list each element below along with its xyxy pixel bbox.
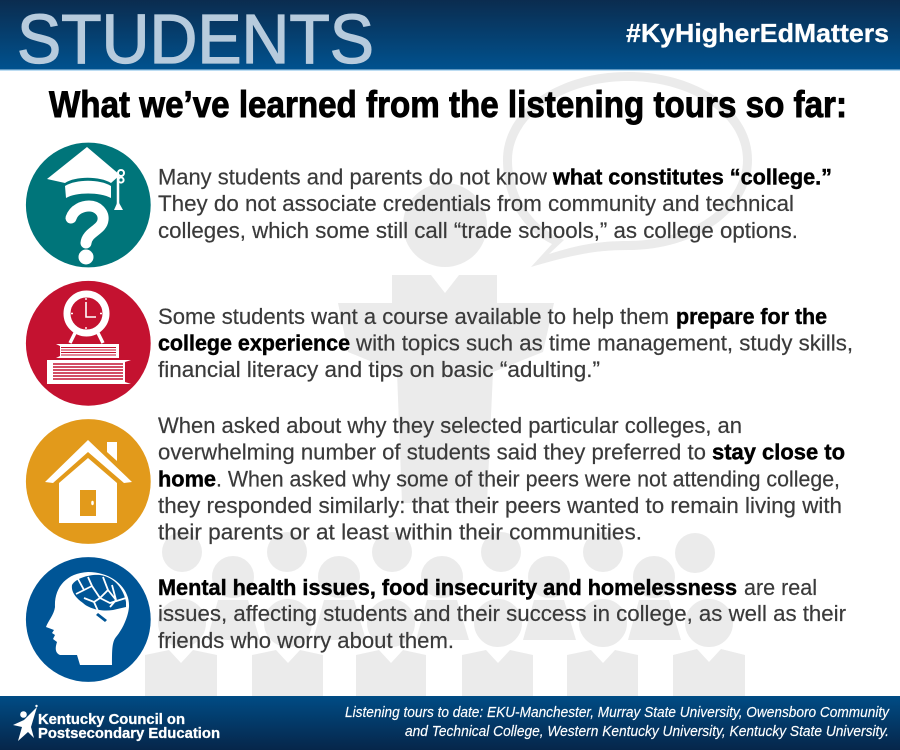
- background: speech bubble: [503, 72, 752, 267]
- text block 4: Mental health issues, food insecurity and homelessness: [158, 575, 737, 600]
- logo text: [38, 712, 220, 742]
- text block 3: they responded similarly: that their peers wanted to remain living with: [158, 493, 842, 518]
- text block 2: Some students want a course available to help them: [158, 304, 669, 329]
- icon: graduation cap with question mark: [26, 143, 151, 267]
- text block 2: with topics such as time management, study skills,: [355, 330, 853, 356]
- text block 4: friends who worry about them.: [158, 628, 454, 653]
- hashtag: #KyHigherEdMatters: [626, 18, 889, 48]
- text block 1: They do not associate credentials from community and technical: [158, 191, 794, 216]
- text block 3: . When asked why some of their peers were not attending college,: [216, 466, 840, 492]
- text block 4: [158, 575, 846, 653]
- text block 1: Many students and parents do not know: [158, 164, 548, 190]
- icon: head with brain: [26, 557, 151, 682]
- text block 1: [158, 164, 832, 243]
- text block 4: issues, affecting students and their success in college, as well as their: [158, 601, 846, 626]
- text block 2: financial literacy and tips on basic “adulting.”: [158, 357, 600, 382]
- icon: clock on books: [26, 281, 151, 406]
- background: central student figure: [338, 183, 554, 503]
- footnote: listening tours to date: [345, 704, 890, 740]
- text block 3: stay close to: [712, 440, 845, 464]
- text block 3: [158, 413, 845, 544]
- text block 2: prepare for the: [676, 304, 827, 329]
- header banner: [0, 0, 900, 78]
- background: crowd of students: [145, 532, 745, 696]
- logo text: Kentucky Council on: [38, 712, 185, 728]
- text block 1: what constitutes “college.”: [552, 164, 832, 190]
- icon: house: [26, 419, 151, 544]
- text block 3: When asked about why they selected particular colleges, an: [158, 413, 742, 438]
- logo text: Postsecondary Education: [38, 726, 220, 742]
- text block 2: [158, 304, 853, 382]
- text block 3: home: [158, 466, 216, 492]
- footer banner: [0, 696, 900, 750]
- text block 2: college experience: [158, 330, 350, 356]
- text block 4: are real: [744, 575, 817, 600]
- title: STUDENTS: STUDENTS: [17, 0, 374, 78]
- text block 3: their parents or at least within their communities.: [158, 520, 642, 544]
- text block 3: overwhelming number of students said they preferred to: [158, 440, 706, 464]
- icon: Kentucky Council figure: [13, 705, 38, 741]
- text block 1: colleges, which some still call “trade schools,” as college options.: [158, 218, 798, 243]
